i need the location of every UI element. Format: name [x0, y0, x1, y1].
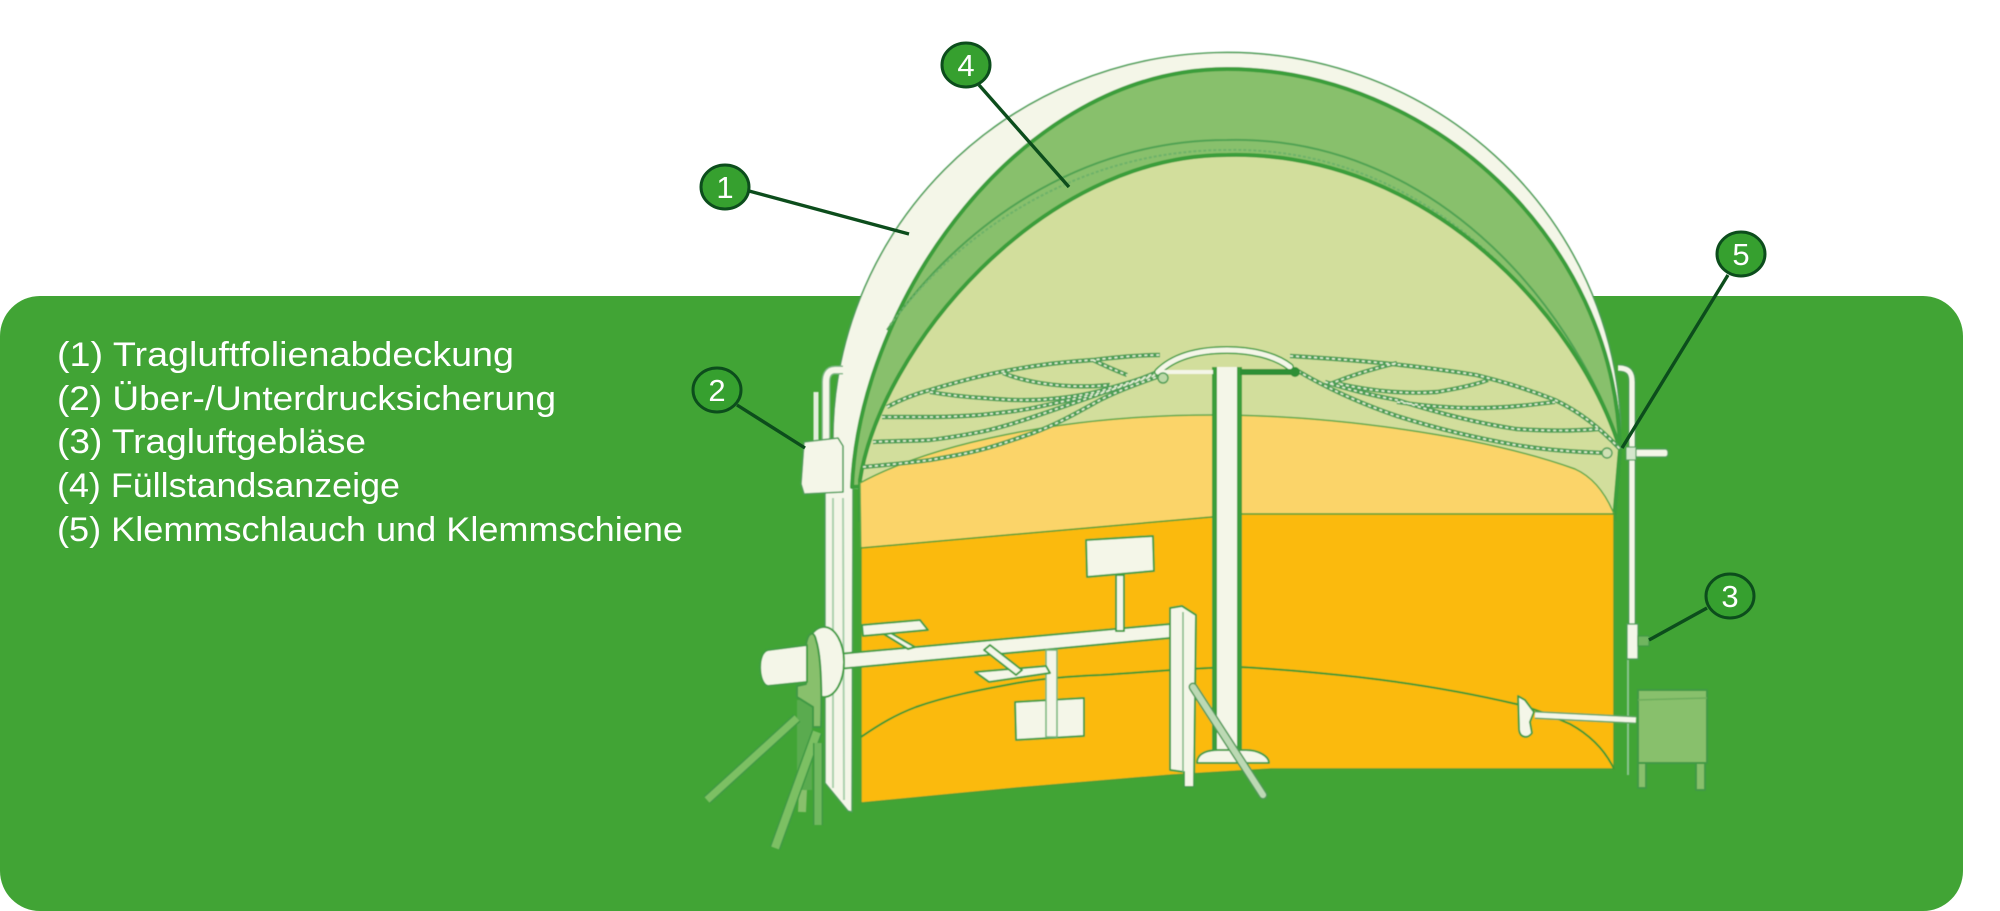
biogas digester illustration [707, 52, 1707, 848]
legend item 1: (1) Tragluftfolienabdeckung [57, 336, 514, 374]
callout 4: 4 [957, 48, 975, 83]
legend item 5: (5) Klemmschlauch und Klemmschiene [57, 511, 683, 549]
gas space [860, 155, 1620, 520]
column head ring [1158, 350, 1300, 383]
callout 1: 1 [716, 170, 734, 205]
wall strand lines [833, 498, 844, 800]
right air pipe [1618, 368, 1632, 775]
agitator left blade [862, 620, 928, 649]
callout 5: 5 [1732, 237, 1750, 272]
agitator middle blade [975, 645, 1050, 682]
agitator tripod [707, 700, 818, 848]
pressure relief pipe [816, 370, 843, 440]
central column [1197, 367, 1269, 763]
substrate feed pipe [1518, 696, 1636, 737]
legend text block [57, 336, 683, 549]
agitator post and strut [1170, 606, 1263, 795]
roof ropes left [863, 355, 1160, 467]
callout 1 [701, 165, 909, 234]
blower connector [1627, 624, 1649, 659]
callout 4 [942, 43, 1069, 187]
substrate [861, 514, 1614, 803]
legend item 2: (2) Über-/Unterdrucksicherung [57, 380, 556, 418]
callout 2: 2 [708, 373, 726, 408]
motor bracket [797, 634, 821, 727]
callout 5 [1622, 232, 1765, 448]
foam layer [860, 415, 1614, 560]
agitator motor [760, 627, 844, 727]
sediment line [861, 667, 1614, 769]
callout 3 [1649, 574, 1754, 640]
legend item 3: (3) Tragluftgebläse [57, 423, 366, 461]
roof ropes right [1290, 356, 1620, 453]
outer air-inflated foil [833, 52, 1620, 490]
legend item 4: (4) Füllstandsanzeige [57, 467, 400, 505]
callout 2 [693, 368, 805, 448]
agitator shaft [838, 623, 1181, 669]
agitator lower paddle [1015, 650, 1084, 740]
callout 3: 3 [1721, 579, 1739, 614]
clamp rail stub [1602, 447, 1668, 460]
pressure relief box [801, 438, 843, 494]
gas membrane band [852, 69, 1620, 487]
level indicator cord [887, 140, 1620, 445]
left outer wall [825, 488, 853, 812]
green background panel [0, 296, 1963, 911]
blower unit [1638, 690, 1707, 790]
agitator upper paddle [1086, 536, 1154, 631]
